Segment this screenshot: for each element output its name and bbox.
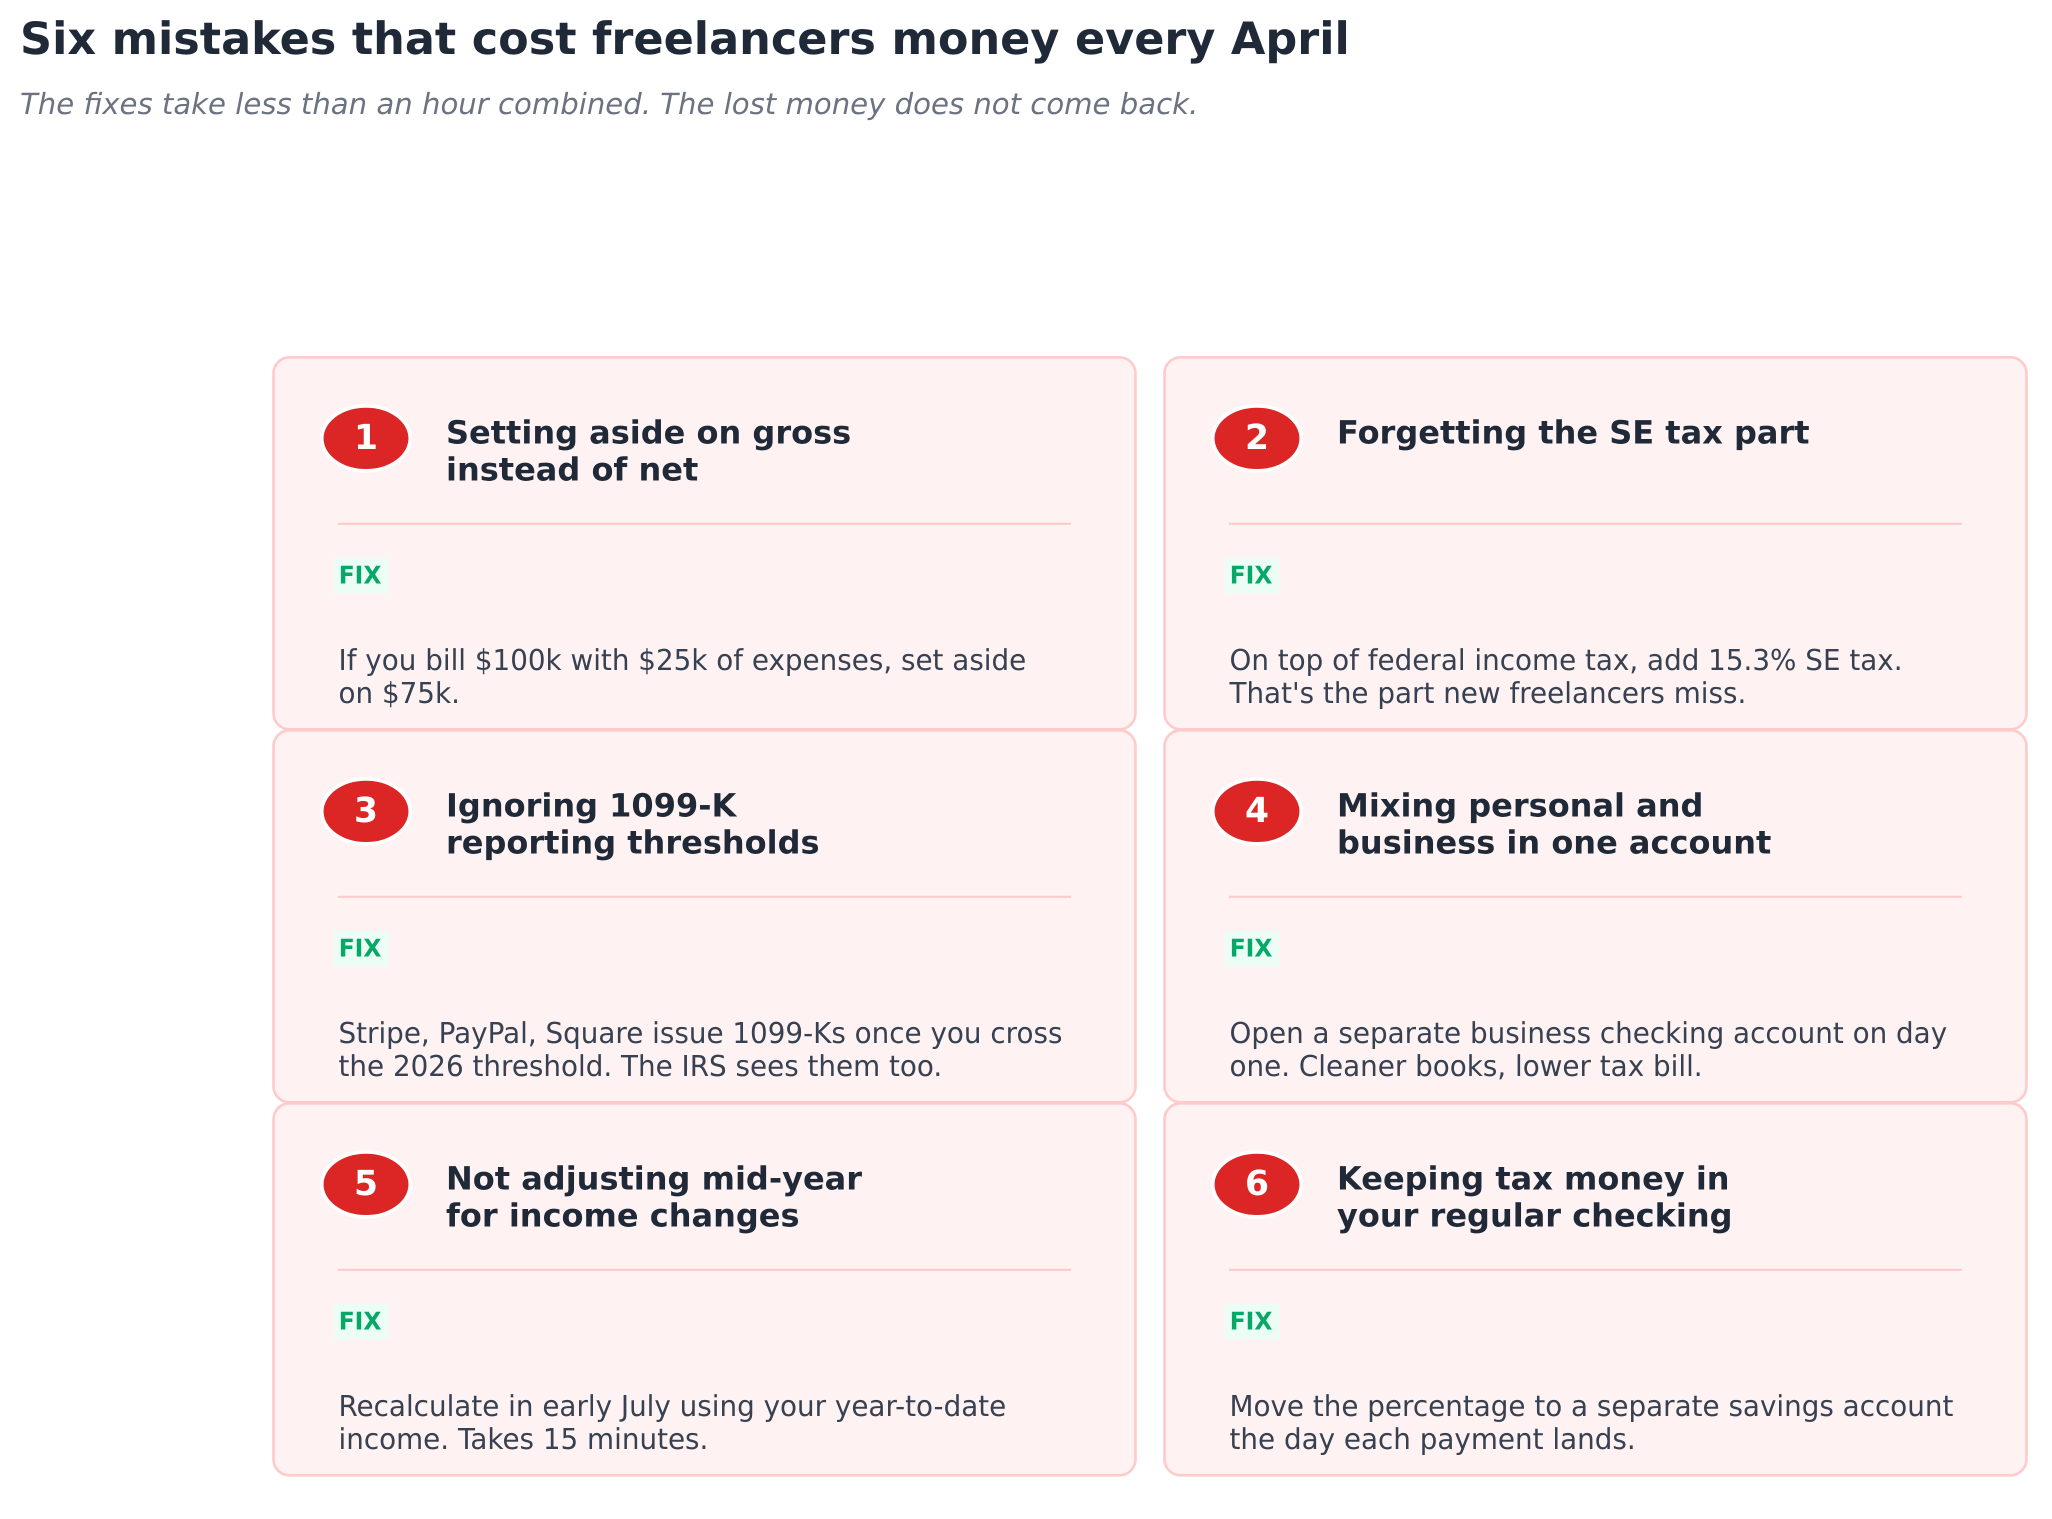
fix label 6: FIX — [1230, 1306, 1273, 1335]
fix label 5 — [334, 1304, 388, 1340]
fix text 2: On top of federal income tax, add 15.3% SE tax. — [1229, 643, 1903, 677]
fix label 6 — [1224, 1304, 1280, 1340]
fix label 2: FIX — [1230, 560, 1273, 589]
fix text 1: If you bill $100k with $25k of expenses, set aside — [338, 643, 1026, 677]
fix label 3: FIX — [339, 933, 382, 962]
fix label 3 — [334, 931, 388, 966]
heading 5: for income changes — [446, 1196, 800, 1234]
subtitle: The fixes take less than an hour combined. The lost money does not come back. — [20, 87, 1198, 121]
fix text 3: the 2026 threshold. The IRS sees them too. — [338, 1049, 942, 1083]
fix text 6: Move the percentage to a separate savings account — [1230, 1389, 1953, 1423]
fix text 1: on $75k. — [338, 676, 460, 710]
heading 3: reporting thresholds — [446, 824, 820, 862]
fix text 4: Open a separate business checking account on day — [1230, 1016, 1947, 1050]
panel: mistake 2 — [1164, 357, 2026, 729]
panel: mistake 1 — [274, 357, 1136, 729]
fix label 5: FIX — [339, 1306, 382, 1335]
heading 2: Forgetting the SE tax part — [1337, 414, 1810, 452]
number badge 6 — [1213, 1152, 1301, 1217]
number badge 2 — [1213, 406, 1301, 471]
heading 6: your regular checking — [1337, 1196, 1733, 1234]
heading 5: Not adjusting mid-year — [446, 1160, 862, 1198]
number badge 4 — [1213, 779, 1301, 844]
heading 1: instead of net — [446, 450, 698, 488]
number badge 5: 5 — [354, 1164, 378, 1204]
panel: mistake 6 — [1164, 1103, 2026, 1475]
title: Six mistakes that cost freelancers money every April — [20, 13, 1350, 65]
panel: mistake 3 — [274, 730, 1136, 1102]
fix text 5: income. Takes 15 minutes. — [338, 1422, 708, 1456]
fix label 4: FIX — [1230, 933, 1273, 962]
number badge 4: 4 — [1245, 791, 1269, 831]
heading 4: business in one account — [1337, 824, 1771, 862]
fix text 6: the day each payment lands. — [1230, 1422, 1636, 1456]
fix text 4: one. Cleaner books, lower tax bill. — [1230, 1049, 1703, 1083]
fix text 3: Stripe, PayPal, Square issue 1099-Ks once you cross — [338, 1016, 1062, 1050]
fix label 1 — [334, 558, 388, 594]
fix label 4 — [1224, 931, 1280, 966]
number badge 1: 1 — [354, 418, 378, 458]
heading 4: Mixing personal and — [1337, 786, 1703, 824]
fix text 5: Recalculate in early July using your year-to-date — [338, 1389, 1006, 1423]
heading 3: Ignoring 1099-K — [446, 786, 738, 824]
heading 6: Keeping tax money in — [1337, 1160, 1730, 1198]
fix text 2: That's the part new freelancers miss. — [1229, 676, 1746, 710]
fix label 2 — [1224, 558, 1280, 594]
number badge 6: 6 — [1245, 1164, 1269, 1204]
number badge 3: 3 — [354, 791, 378, 831]
panel: mistake 4 — [1164, 730, 2026, 1102]
panel: mistake 5 — [274, 1103, 1136, 1475]
heading 1: Setting aside on gross — [446, 414, 851, 452]
number badge 2: 2 — [1245, 418, 1269, 458]
number badge 3 — [322, 779, 410, 844]
fix label 1: FIX — [339, 560, 382, 589]
number badge 5 — [322, 1152, 410, 1217]
number badge 1 — [322, 406, 410, 471]
